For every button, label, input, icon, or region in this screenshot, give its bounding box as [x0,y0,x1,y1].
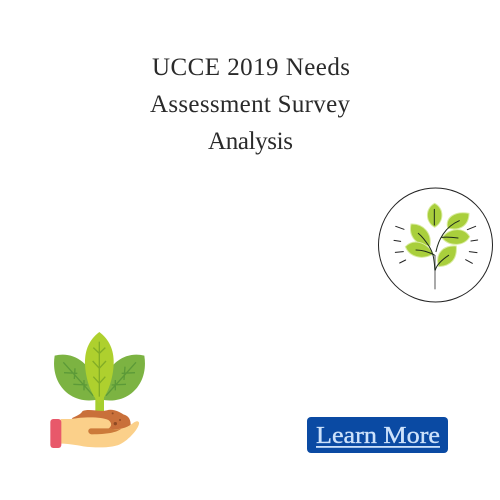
button: Learn More: Learn More [316,423,440,449]
button: Learn More [307,417,448,453]
side leaves [54,355,145,401]
cuff [50,419,61,448]
stem [95,392,104,412]
centre leaf [85,332,114,403]
title: Analysis [208,128,293,155]
soil [72,410,131,432]
title: Assessment Survey [150,91,350,118]
title: UCCE 2019 Needs [152,54,350,81]
icon: branch with leaves in circle [378,188,492,302]
icon: hand holding plant [50,332,145,448]
hand [61,417,139,447]
title [150,54,350,155]
